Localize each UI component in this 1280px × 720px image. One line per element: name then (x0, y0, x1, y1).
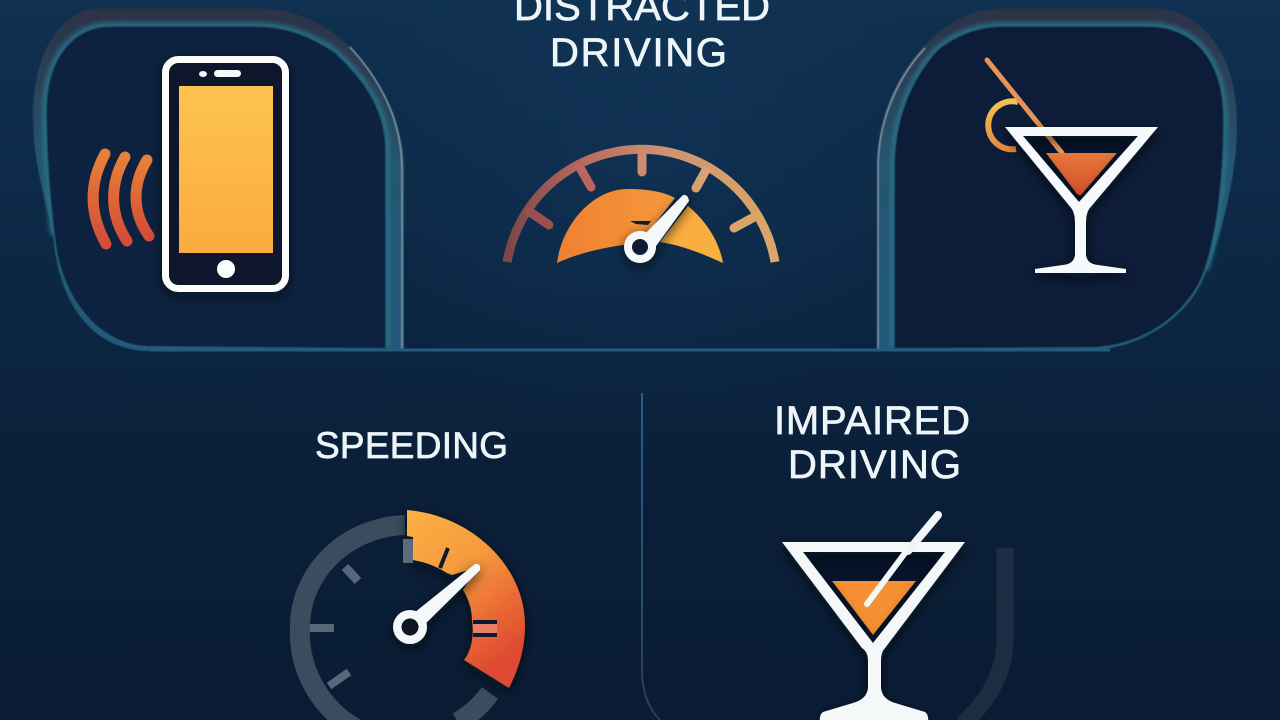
gauge fill right (660, 206, 723, 263)
icon: vibrating phone (93, 60, 286, 288)
phone body (166, 60, 286, 288)
horizontal divider (150, 348, 1110, 352)
icon: cocktail lower (782, 515, 965, 720)
speedometer ring (300, 525, 490, 720)
speedometer red zone (407, 510, 525, 688)
heading: distracted driving: DRIVING (550, 31, 727, 75)
heading: distracted driving (514, 0, 770, 75)
gauge fill left (557, 189, 675, 263)
vibration waves (93, 154, 149, 244)
icon: speedometer (300, 510, 525, 720)
cocktail liquid (1046, 153, 1117, 195)
panel: cocktail card (877, 8, 1237, 350)
martini liquid (832, 581, 916, 635)
speedometer needle (393, 564, 480, 644)
icon: cocktail upper (987, 60, 1158, 273)
speedometer ticks (310, 539, 497, 686)
cocktail stick (987, 60, 1062, 153)
cocktail ring (988, 101, 1018, 149)
phone home button (217, 260, 235, 278)
cocktail glass (1005, 127, 1158, 273)
martini straw (867, 515, 938, 604)
lower right card edge (962, 548, 1005, 720)
heading: impaired driving: DRIVING (788, 443, 961, 487)
panel: phone card (33, 8, 404, 351)
phone screen (179, 86, 273, 253)
heading: speeding: SPEEDING (315, 425, 508, 466)
gauge needle (624, 195, 689, 263)
vertical divider and lower card outline (642, 393, 660, 720)
martini glass (782, 542, 965, 720)
gauge arc and ticks (507, 149, 775, 262)
phone speaker (199, 70, 241, 77)
icon: half gauge (507, 149, 775, 263)
cocktail glass interior (1023, 136, 1138, 202)
heading: impaired driving (774, 399, 970, 487)
heading: impaired driving: IMPAIRED (774, 399, 970, 443)
martini glass interior (803, 552, 945, 643)
